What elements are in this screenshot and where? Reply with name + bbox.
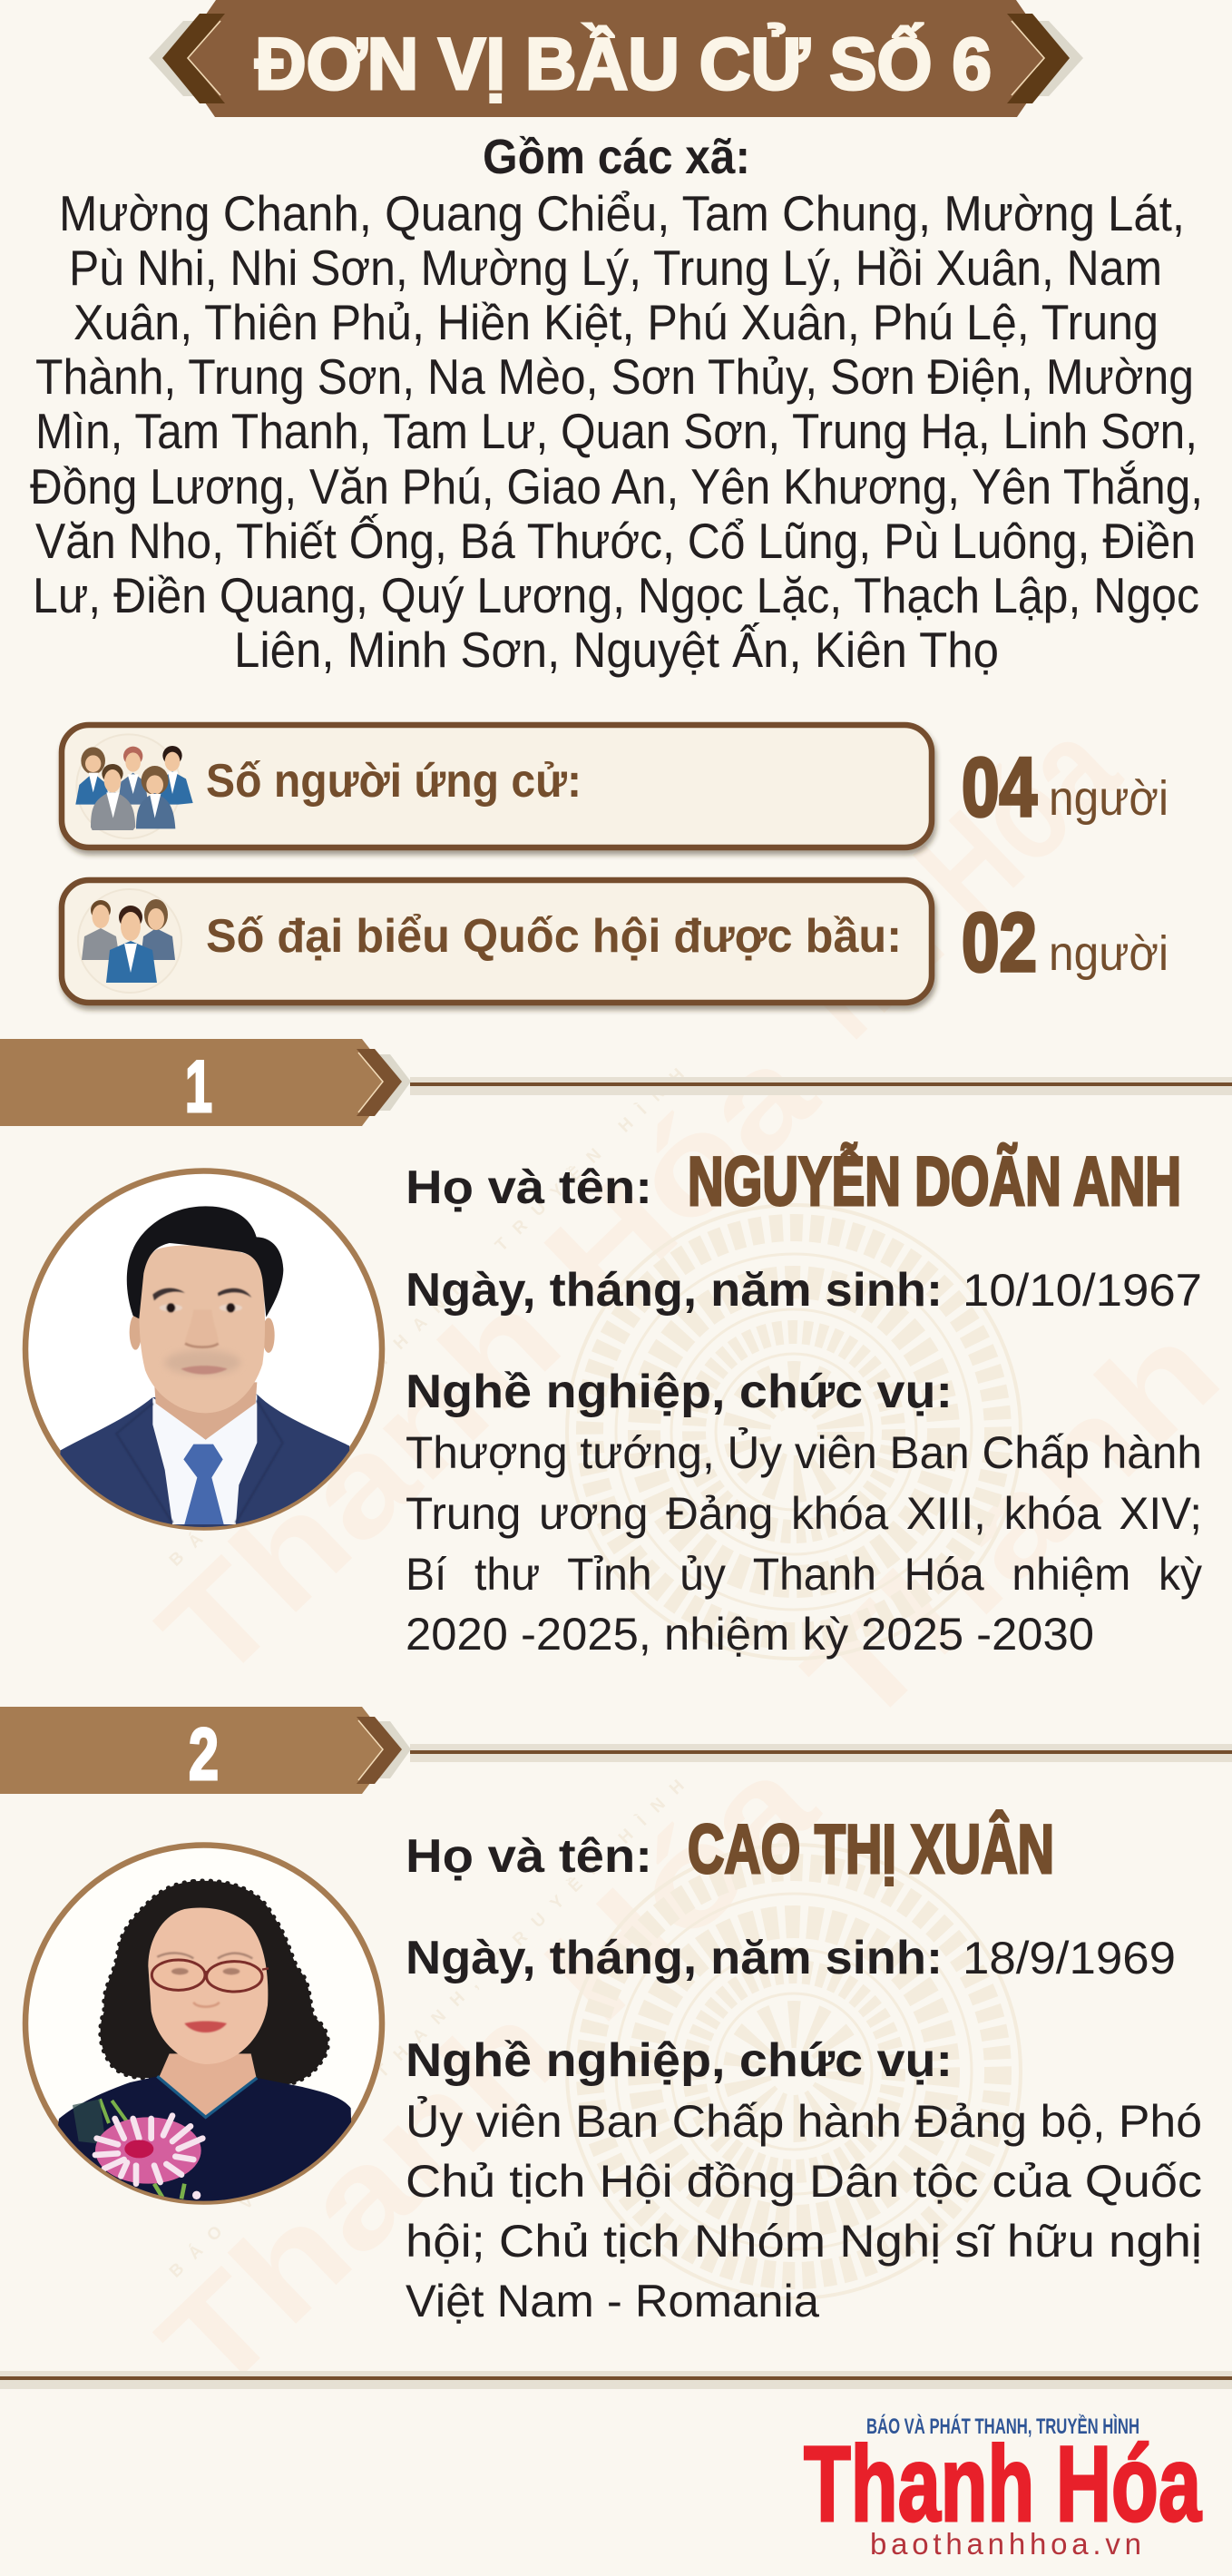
label: Số đại biểu Quốc hội được bầu:: [206, 910, 902, 963]
commune list heading: Gồm các xã:: [483, 130, 750, 184]
commune list: Liên, Minh Sơn, Nguyệt Ấn, Kiên Thọ: [234, 622, 999, 678]
watermark: Thanh Hóa newspaper marks: Thanh: [777, 1293, 1232, 1756]
watermark: Thanh Hóa newspaper marks: Thanh Hóa: [131, 1725, 845, 2422]
candidate 2 details: [406, 1810, 1202, 2326]
stat: 04 người: người: [1049, 771, 1168, 826]
section 1 header bar: [0, 1039, 1232, 1128]
position field: Nghề nghiệp, chức vụ:: [406, 2034, 953, 2087]
number 2: 2: [189, 1714, 219, 1796]
section 2 header bar: [0, 1707, 1232, 1796]
logo: Báo và Phát thanh, Truyền hình Thanh Hóa: baothanhhoa.vn: [870, 2527, 1141, 2561]
name field: Họ và tên:: [406, 1830, 652, 1883]
candidate 2 details: 18/9/1969: [963, 1933, 1176, 1983]
stat: 04 người: [962, 741, 1168, 834]
title text: ĐƠN VỊ BẦU CỬ SỐ 6: [255, 23, 992, 105]
candidate 2 details: hội; Chủ tịch Nhóm Nghị sĩ hữu nghị: [406, 2216, 1202, 2267]
watermark: bronze drum, section 1: [567, 1205, 1021, 1659]
label: Số người ứng cử:: [206, 755, 582, 808]
number 1: 1: [185, 1046, 212, 1128]
commune list: [30, 130, 1203, 678]
stat: 04 người: 04: [962, 741, 1037, 834]
candidate 1 details: 2020 -2025, nhiệm kỳ 2025 -2030: [406, 1609, 1094, 1660]
stat: 02 người: [962, 896, 1168, 989]
candidate 1 details: Trung ương Đảng khóa XIII, khóa XIV;: [406, 1488, 1202, 1539]
stat: 02 người: 02: [962, 896, 1037, 989]
watermark: bronze drum, section 2: [567, 1845, 1021, 2298]
watermark: Thanh Hóa newspaper marks: Thanh Hóa: [131, 1014, 845, 1710]
stat: 02 người: người: [1049, 926, 1168, 981]
candidate 1 details: Bí thư Tỉnh ủy Thanh Hóa nhiệm kỳ: [406, 1549, 1202, 1600]
birth date field: Ngày, tháng, năm sinh:: [406, 1932, 943, 1984]
candidate 2 details: Việt Nam - Romania: [406, 2276, 819, 2326]
icon: three delegates: [78, 889, 181, 993]
candidate 1 details: [406, 1142, 1202, 1660]
candidate 2 details: Ủy viên Ban Chấp hành Đảng bộ, Phó: [406, 2095, 1202, 2147]
candidate 2 details: CAO THỊ XUÂN: [688, 1810, 1054, 1888]
position field: Nghề nghiệp, chức vụ:: [406, 1366, 953, 1418]
icon: group of candidates: [75, 734, 193, 838]
watermark: Thanh Hóa newspaper marks: BÁO VÀ PHÁT THANH, TRUYỀN HÌNH: [165, 1776, 689, 2282]
candidate 2 details: Chủ tịch Hội đồng Dân tộc của Quốc: [406, 2156, 1202, 2207]
title banner: [149, 0, 1083, 117]
footer divider: [0, 2371, 1232, 2389]
portrait: Nguyễn Doãn Anh: [25, 1170, 382, 1545]
panel: delegates to elect: [62, 880, 932, 1003]
candidate 1 details: Thượng tướng, Ủy viên Ban Chấp hành: [406, 1426, 1202, 1478]
panel: candidates count: [62, 725, 932, 847]
portrait: Cao Thị Xuân: [25, 1846, 382, 2217]
name field: Họ và tên:: [406, 1161, 652, 1214]
commune list: Xuân, Thiên Phủ, Hiền Kiệt, Phú Xuân, Phú Lệ, Trung: [73, 294, 1159, 350]
birth date field: Ngày, tháng, năm sinh:: [406, 1264, 943, 1317]
watermark: Thanh Hóa newspaper marks: [131, 691, 1232, 2422]
watermark: Thanh Hóa newspaper marks: BÁO VÀ PHÁT THANH, TRUYỀN HÌNH: [165, 1064, 689, 1571]
candidate 1 details: 10/10/1967: [963, 1265, 1202, 1316]
watermark: Thanh Hóa newspaper marks: nh Hóa: [765, 691, 1146, 1066]
